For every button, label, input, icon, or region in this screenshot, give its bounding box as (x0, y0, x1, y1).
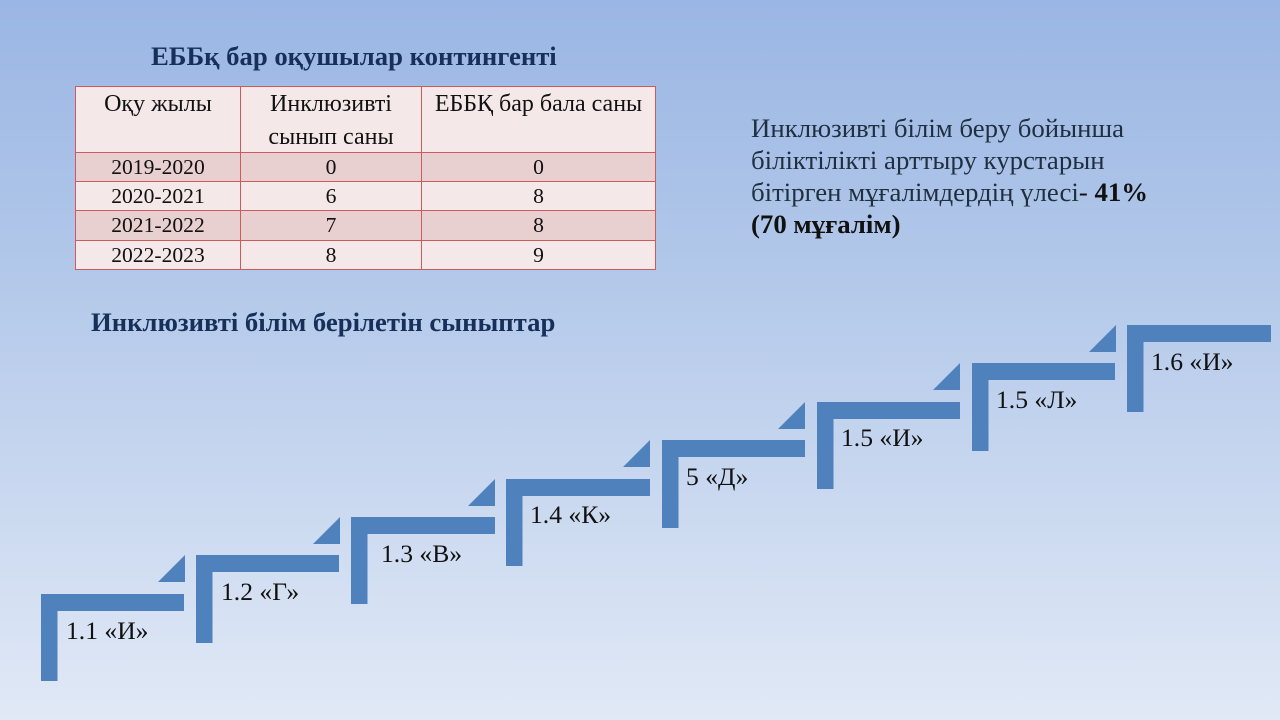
table: student contingent by year: 8 (533, 213, 544, 237)
text block: teacher training share: бітірген мұғалімдердің үлесі- 41% (751, 177, 1148, 207)
table: student contingent by year: 2022-2023 (111, 243, 205, 267)
arrow tip 5 (778, 402, 805, 429)
heading: student contingent: ЕББқ бар оқушылар контингенті (151, 41, 557, 71)
table: student contingent by year: 0 (533, 155, 544, 179)
step: 1.2 Г (196, 555, 339, 643)
step: 5 Д: 5 «Д» (686, 462, 748, 491)
table: student contingent by year: 2021-2022 (111, 213, 205, 237)
table: student contingent by year: 7 (326, 213, 336, 237)
table: student contingent by year: ЕББҚ бар бала саны (435, 90, 642, 116)
arrow tip 4 (623, 440, 650, 467)
table: student contingent by year: 9 (533, 243, 544, 267)
text block: teacher training share: Инклюзивті білім беру бойынша (751, 113, 1124, 143)
table: student contingent by year: сынып саны (268, 124, 394, 150)
text block: teacher training share: біліктілікті арттыру курстарын (751, 145, 1105, 175)
step: 1.3 В (351, 517, 495, 604)
table: student contingent by year: 6 (326, 184, 336, 208)
step: 1.5 Л (972, 363, 1115, 451)
arrow tip 7 (1089, 325, 1116, 352)
step: 1.5 И: 1.5 «И» (841, 423, 923, 452)
arrow tip 6 (933, 363, 960, 390)
table: student contingent by year (75, 86, 656, 270)
step: 1.1 И: 1.1 «И» (66, 616, 148, 645)
arrow tip 1 (158, 555, 185, 582)
text block: teacher training share: (70 мұғалім) (751, 209, 901, 239)
step: 5 Д (662, 440, 805, 528)
step: 1.5 И (817, 402, 960, 489)
step: 1.1 И (41, 594, 184, 681)
step: 1.5 Л: 1.5 «Л» (996, 385, 1077, 414)
arrow tip 2 (313, 517, 340, 544)
table: student contingent by year: 8 (326, 243, 336, 267)
table: student contingent by year: Оқу жылы (104, 90, 212, 116)
table: student contingent by year: 0 (326, 155, 336, 179)
step: 1.4 К (506, 479, 650, 566)
table: student contingent by year: 2020-2021 (111, 184, 205, 208)
heading: inclusive classes: Инклюзивті білім берілетін сыныптар (91, 307, 555, 337)
table: student contingent by year: 2019-2020 (111, 155, 205, 179)
table: student contingent by year: 8 (533, 184, 544, 208)
text block: teacher training share (751, 113, 1148, 239)
table: student contingent by year: Инклюзивті (270, 90, 392, 116)
step: 1.2 Г: 1.2 «Г» (221, 577, 299, 606)
step: 1.6 И: 1.6 «И» (1151, 347, 1233, 376)
step: 1.4 К: 1.4 «К» (530, 500, 611, 529)
step: 1.6 И (1127, 325, 1271, 412)
step: 1.3 В: 1.3 «В» (381, 539, 462, 568)
arrow tip 3 (468, 479, 495, 506)
